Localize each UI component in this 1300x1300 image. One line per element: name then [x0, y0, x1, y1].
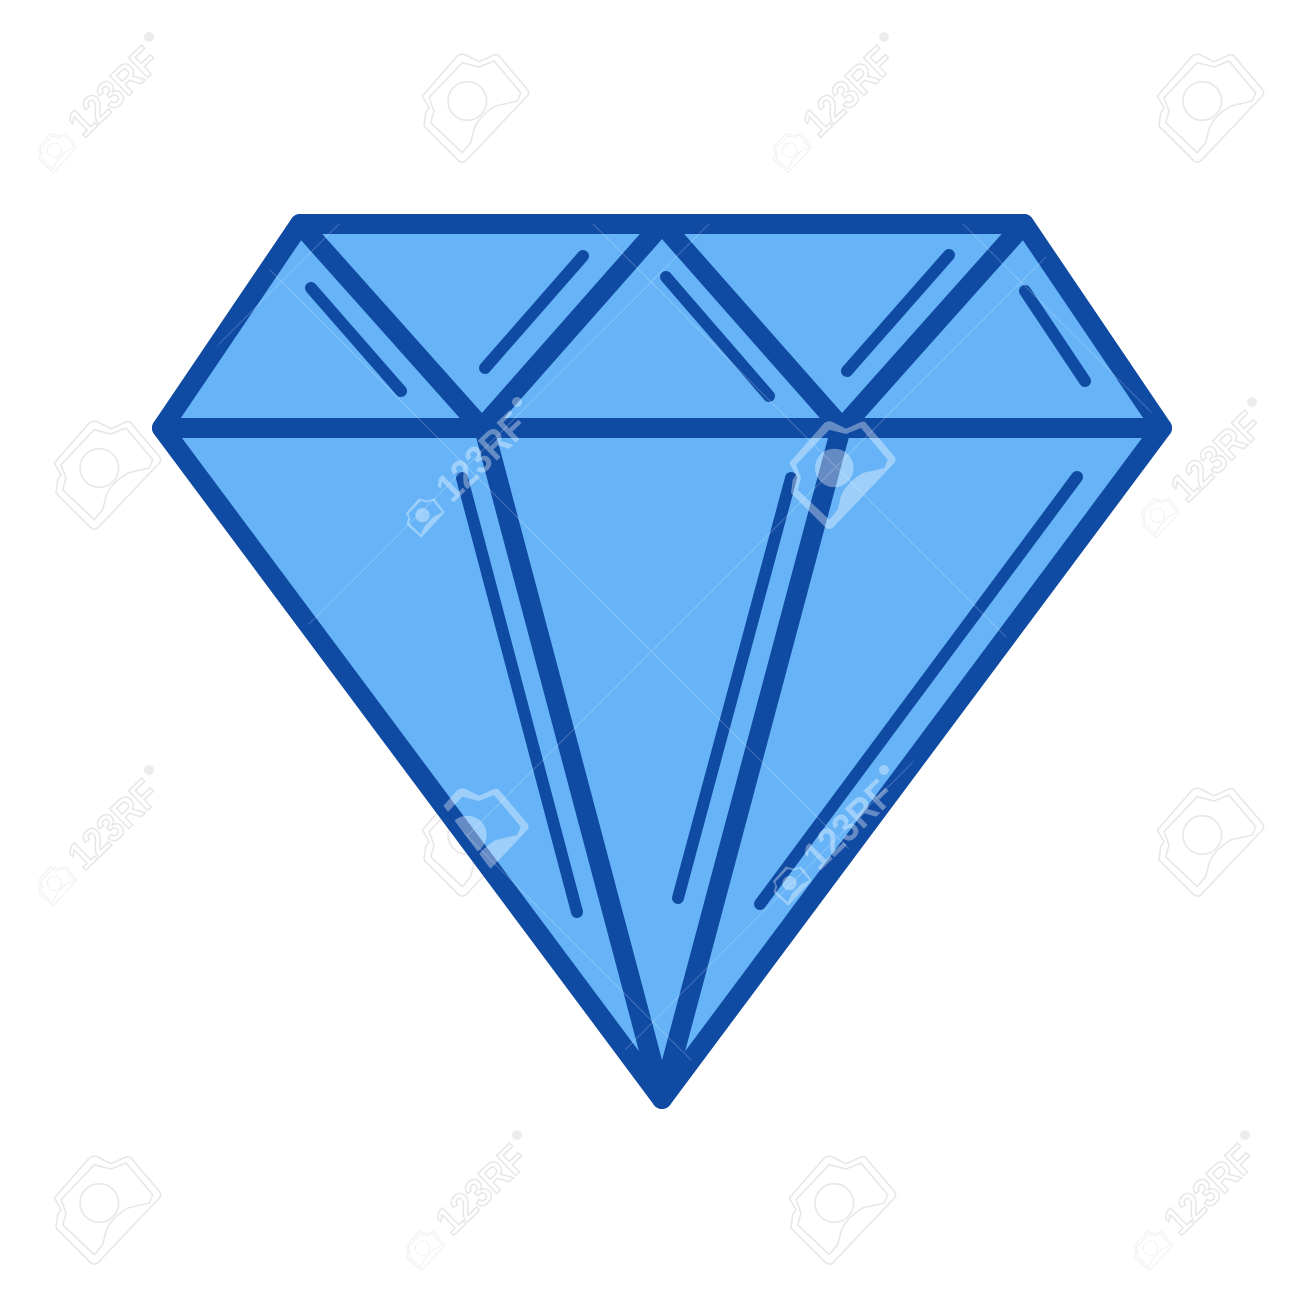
watermark text, outline layer: 123RF — [60, 772, 168, 878]
diamond fill — [162, 224, 1162, 1099]
watermark overlay: stamp over diamond lower left — [444, 788, 529, 869]
watermark text, outline layer: 123RF — [795, 39, 903, 145]
watermark overlay: stamp over diamond top right of centre — [789, 421, 896, 529]
watermark text, outline layer: 123RF — [1156, 1137, 1264, 1243]
watermark text, outline layer: 123RF — [60, 39, 168, 145]
watermark text, outline layer: 123RF — [1163, 404, 1271, 510]
watermark overlay: text over diamond left — [406, 397, 536, 538]
diamond outline and facets — [162, 224, 1162, 1099]
watermark overlay: text over diamond left: 123RF — [428, 404, 536, 510]
watermark text, outline layer: 123RF — [428, 1137, 536, 1243]
watermark overlay: text over diamond right — [773, 765, 903, 906]
watermark overlay: text over diamond right: 123RF — [795, 772, 903, 878]
faint diagonal watermark grid — [217, 224, 1153, 1060]
